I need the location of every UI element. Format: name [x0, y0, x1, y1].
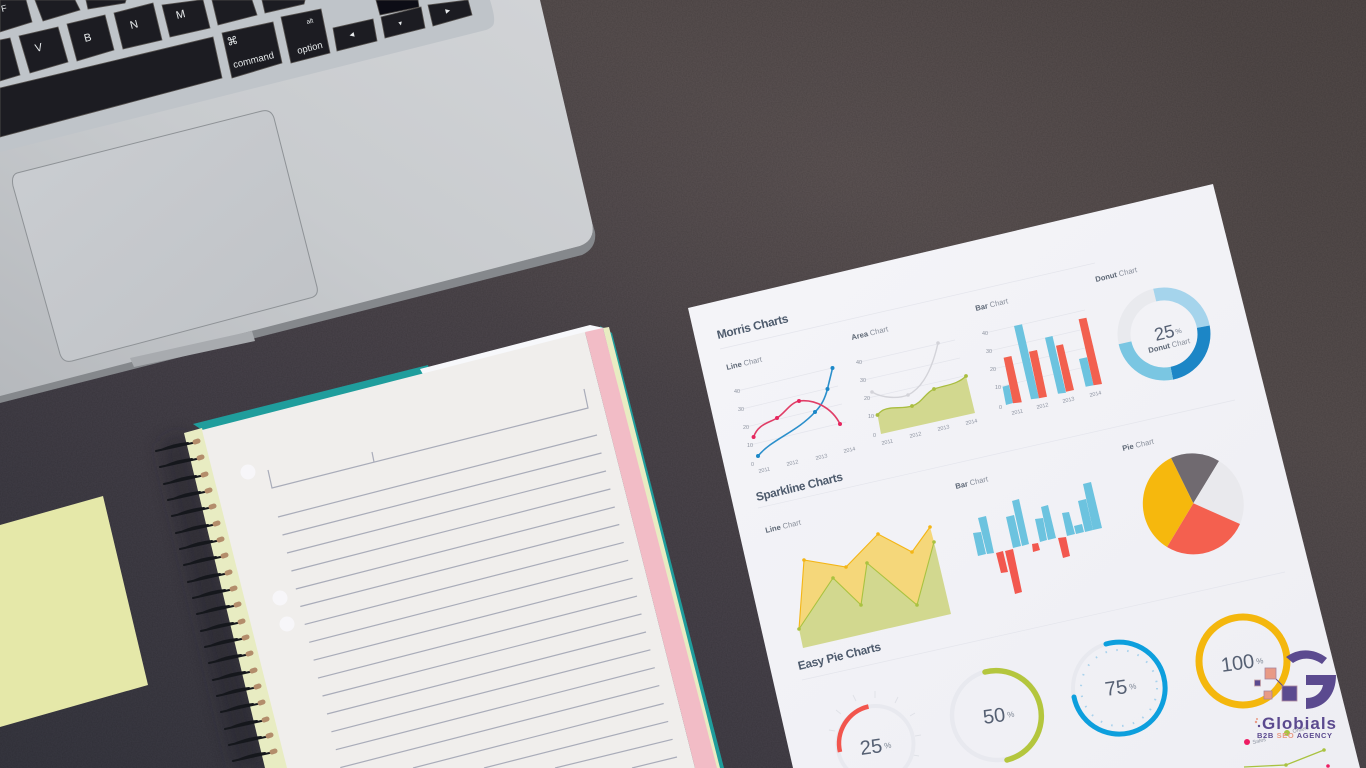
line chart: 2011	[758, 466, 771, 475]
area chart: 2011	[881, 438, 894, 447]
key labels: M	[175, 8, 187, 22]
spiral shadow on desk	[160, 433, 265, 768]
line chart: 2012	[786, 459, 799, 468]
pie chart: Pie Chart	[1121, 436, 1156, 453]
line chart: 10	[747, 443, 753, 449]
laptop body	[0, 0, 593, 396]
sparkline bar chart	[954, 474, 1102, 594]
area chart: 20	[864, 396, 870, 402]
easy pie 25%	[829, 691, 921, 768]
key labels: alt	[306, 17, 314, 26]
front notch	[130, 331, 255, 367]
easy pie 50%: %	[1007, 710, 1015, 720]
easy pie 75%	[1073, 642, 1165, 734]
bar chart: 2013	[1062, 396, 1075, 405]
key labels: ⌘	[226, 35, 239, 49]
donut chart	[1094, 265, 1204, 374]
area chart: 0	[873, 433, 876, 439]
logo wordmark: Globials	[1262, 714, 1336, 733]
sparkline line chart	[764, 518, 951, 648]
key labels: command	[232, 50, 275, 71]
easy pie 100%: %	[1256, 656, 1264, 666]
logo mark	[1254, 650, 1336, 709]
bar chart: Bar Chart	[974, 296, 1010, 313]
line chart: 20	[743, 425, 749, 431]
easy pie 100%	[1199, 617, 1287, 705]
sheet	[688, 184, 1360, 768]
heading: Morris Charts: Morris Charts	[715, 311, 790, 342]
pie chart	[1121, 436, 1244, 554]
sparkline bar chart: Bar Chart	[954, 474, 990, 491]
key labels	[0, 3, 451, 71]
area chart: 2013	[937, 424, 950, 433]
line chart: 2013	[815, 453, 828, 462]
key labels: F	[0, 3, 8, 14]
key labels: option	[296, 40, 324, 57]
area chart: 30	[860, 378, 866, 384]
page	[202, 332, 695, 768]
sparkline line chart: Line Chart	[764, 518, 803, 535]
paper report sheet	[688, 184, 1360, 768]
keyboard well	[0, 0, 494, 152]
bar chart: 20	[990, 367, 996, 373]
trackpad	[12, 111, 317, 361]
key labels: V	[34, 41, 44, 55]
white top sheets	[420, 325, 604, 378]
logo wordmark	[1255, 714, 1336, 740]
line chart: 0	[751, 462, 754, 468]
logo wordmark: B2B SEO AGENCY	[1257, 731, 1333, 740]
donut chart: %	[1175, 328, 1183, 336]
area chart: 10	[868, 414, 874, 420]
laptop front edge	[0, 222, 595, 403]
key labels: N	[129, 18, 139, 32]
partial chart at bottom of sheet: Orders	[1292, 725, 1310, 735]
key labels: B	[83, 31, 93, 45]
spiral binding	[156, 441, 275, 761]
bar chart: 2011	[1011, 408, 1024, 417]
area chart: 2012	[909, 431, 922, 440]
pink pages	[585, 328, 717, 768]
partial chart at bottom of sheet	[1244, 725, 1330, 768]
logo: Globials	[1254, 650, 1336, 740]
bar chart: 2014	[1089, 390, 1102, 399]
easy pie 75%: %	[1129, 682, 1137, 692]
punched holes	[240, 464, 294, 632]
easy pie 75%: 75	[1104, 676, 1129, 701]
easy pie 25%: 25	[859, 735, 884, 760]
bar chart: 40	[982, 331, 988, 337]
line chart: Line Chart	[725, 355, 764, 372]
area chart: 2014	[965, 418, 978, 427]
notebook	[156, 325, 724, 768]
area chart	[850, 324, 978, 447]
keyboard keys	[0, 0, 472, 137]
bar chart: 10	[995, 385, 1001, 391]
easy pie 100%: 100	[1220, 651, 1256, 677]
bar chart	[974, 296, 1102, 417]
bar chart: 2012	[1036, 402, 1049, 411]
key labels: ▶	[445, 8, 451, 15]
easy pie 50%: 50	[982, 704, 1007, 729]
key labels: ◀	[349, 32, 355, 39]
cream back pages	[184, 327, 720, 768]
ruled lines	[268, 389, 677, 768]
donut chart: Donut Chart	[1094, 265, 1139, 284]
easy pie 25%: %	[884, 741, 892, 751]
heading: Easy Pie Charts: Easy Pie Charts	[796, 639, 883, 673]
sticky note	[0, 496, 148, 727]
line chart: 30	[738, 407, 744, 413]
teal cover	[193, 326, 724, 768]
section dividers	[720, 263, 1285, 680]
bar chart: 30	[986, 349, 992, 355]
key labels: ▼	[397, 21, 404, 28]
line chart: 40	[734, 389, 740, 395]
easy pie 50%	[952, 670, 1042, 760]
line chart	[725, 355, 856, 475]
area chart: Area Chart	[850, 324, 890, 342]
laptop	[0, 0, 595, 403]
donut chart: Donut Chart	[1147, 336, 1192, 355]
partial chart at bottom of sheet: Sales	[1252, 737, 1267, 746]
line chart: 2014	[843, 446, 856, 455]
donut chart: 25	[1152, 321, 1176, 345]
bar chart: 0	[999, 405, 1002, 411]
area chart: 40	[856, 360, 862, 366]
heading: Sparkline Charts: Sparkline Charts	[754, 469, 845, 504]
